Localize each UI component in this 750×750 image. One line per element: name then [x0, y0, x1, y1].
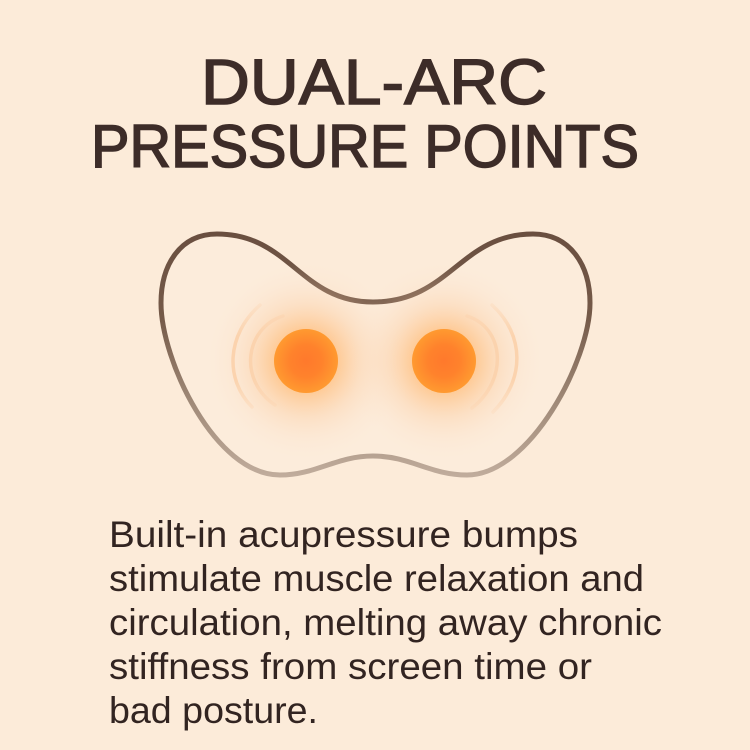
- title: [91, 46, 639, 180]
- pillow outline: [161, 234, 590, 475]
- description text: circulation, melting away chronic: [109, 602, 662, 643]
- left pressure point: [208, 263, 404, 459]
- title: PRESSURE POINTS: [91, 113, 639, 180]
- diagram: pillow with pressure points: [161, 234, 590, 475]
- description text: Built-in acupressure bumps: [109, 514, 578, 555]
- right pressure point: [346, 263, 542, 459]
- description text: stiffness from screen time or: [109, 646, 592, 687]
- description text: [109, 514, 662, 731]
- description text: stimulate muscle relaxation and: [109, 558, 644, 599]
- title: DUAL-ARC: [201, 46, 547, 118]
- description text: bad posture.: [109, 690, 318, 731]
